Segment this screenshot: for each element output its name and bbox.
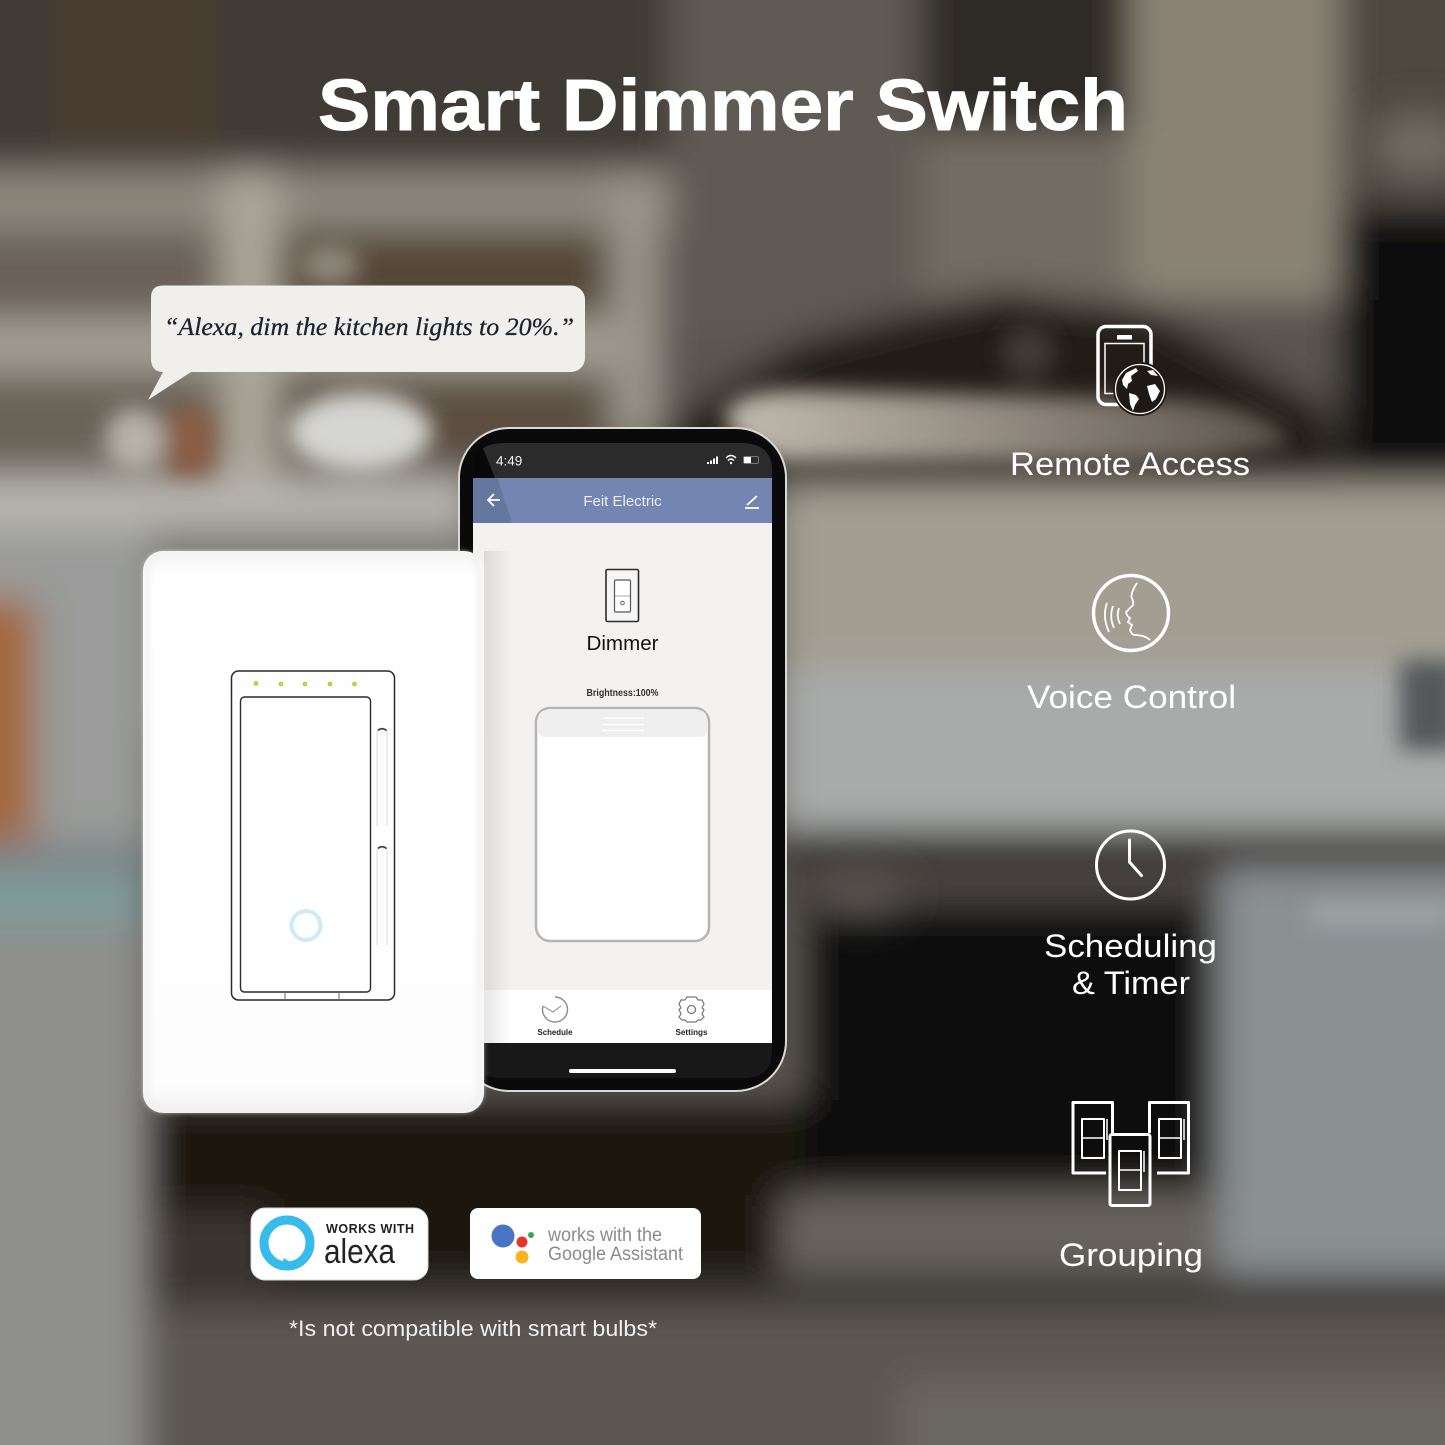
tab: schedule: Schedule	[538, 1028, 573, 1037]
feature: voice control	[1027, 576, 1236, 715]
badge: works with the Google Assistant	[470, 1208, 701, 1279]
tab: schedule	[538, 997, 573, 1037]
title: Smart Dimmer Switch	[318, 66, 1128, 146]
dimmer switch wall plate	[143, 551, 484, 1113]
badge: works with alexa	[251, 1208, 428, 1280]
LED indicators	[254, 682, 356, 686]
rocker paddle	[240, 697, 370, 992]
feature: scheduling and timer: Scheduling	[1044, 928, 1217, 964]
app header bar	[473, 478, 772, 523]
badge: works with alexa: alexa	[324, 1233, 395, 1271]
app header bar: Feit Electric	[583, 493, 662, 510]
speech bubble callout: “Alexa, dim the kitchen lights to 20%.”	[164, 314, 574, 341]
touch ring	[292, 911, 320, 940]
feature: voice control: Voice Control	[1027, 679, 1236, 715]
status bar	[496, 454, 758, 468]
brightness label: Brightness:100%	[586, 688, 659, 699]
switch frame	[232, 671, 394, 1000]
feature: grouping: Grouping	[1059, 1237, 1203, 1273]
feature: remote access	[1010, 326, 1250, 482]
feature: grouping	[1059, 1102, 1203, 1273]
footnote: *Is not compatible with smart bulbs*	[289, 1316, 657, 1341]
feature: scheduling and timer: & Timer	[1072, 965, 1190, 1001]
status bar: 4:49	[496, 454, 522, 468]
home bar	[569, 1069, 676, 1073]
device name: Dimmer	[586, 633, 659, 655]
badge: works with the Google Assistant: Google Assistant	[548, 1244, 684, 1265]
feature: scheduling and timer	[1044, 831, 1217, 1001]
smartphone with app	[459, 428, 786, 1091]
dim up slot	[377, 728, 387, 826]
feature: remote access: Remote Access	[1010, 446, 1250, 482]
speech bubble callout	[148, 286, 585, 400]
tab: settings: Settings	[676, 1028, 708, 1037]
brightness slider	[536, 708, 709, 941]
icon: phone with globe	[1098, 326, 1167, 416]
badge: works with the Google Assistant: works with the	[547, 1225, 662, 1246]
badge: works with alexa: WORKS WITH	[326, 1222, 414, 1236]
dim down slot	[377, 846, 387, 945]
icon: clock	[1096, 831, 1164, 899]
bottom tab	[285, 992, 339, 1000]
app dimmer icon	[606, 570, 638, 622]
icon: speaking head	[1094, 576, 1168, 650]
icon: three switches	[1073, 1102, 1188, 1206]
tab: settings	[676, 997, 708, 1037]
